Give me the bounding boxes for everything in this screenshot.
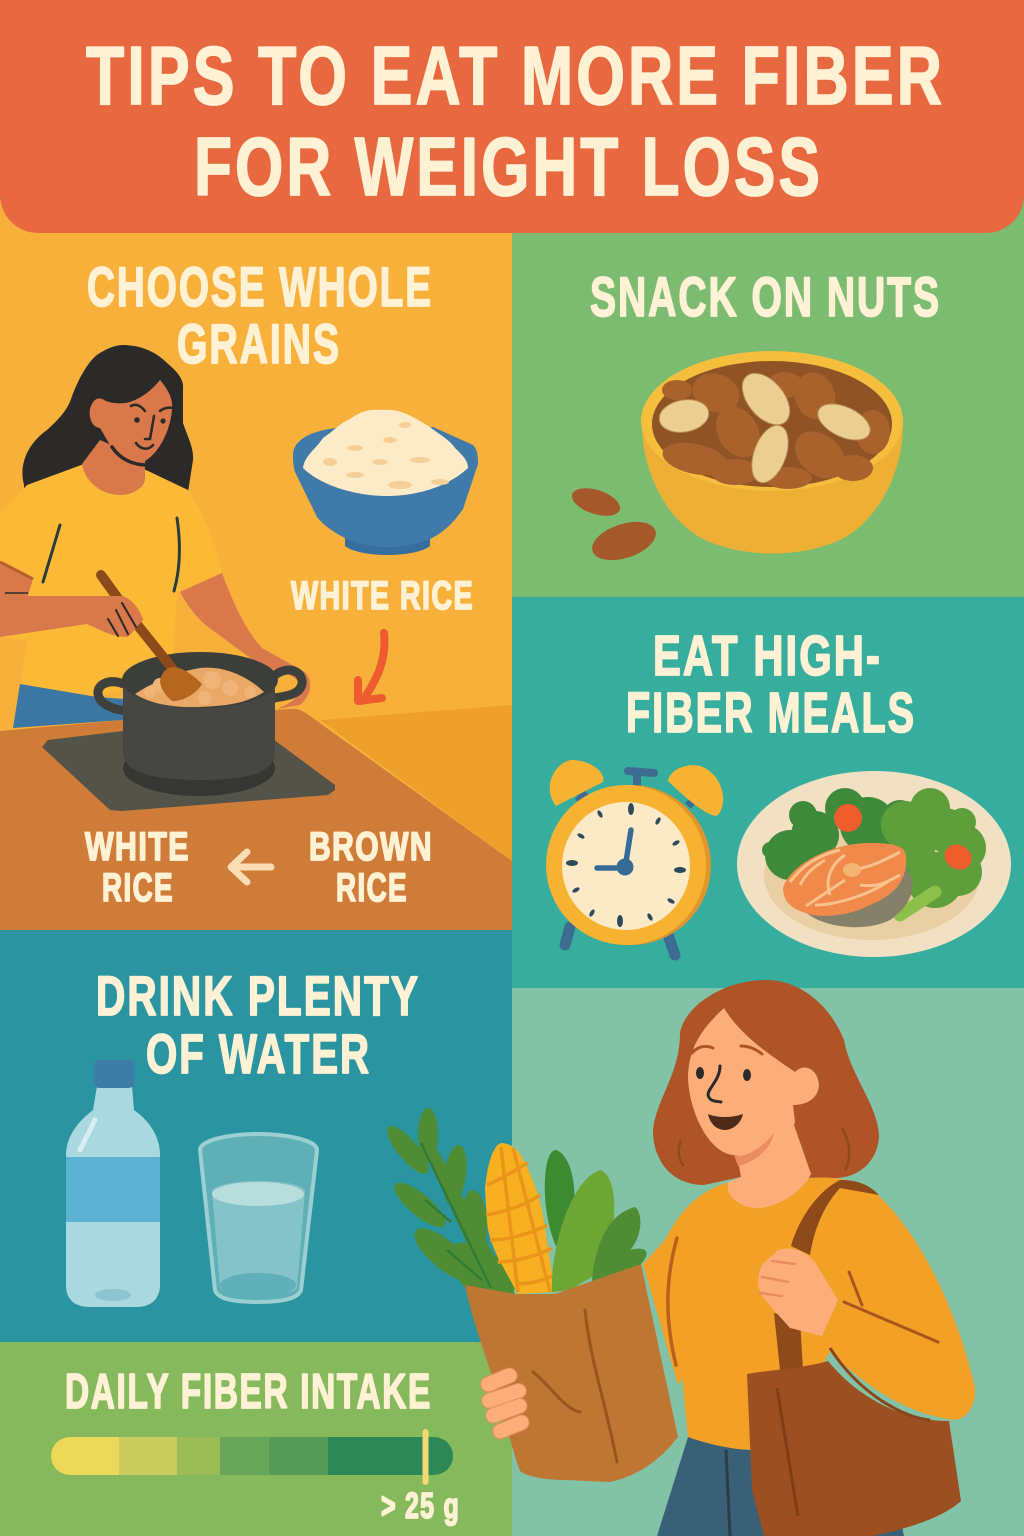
label: greater than 25 g: > 25 g xyxy=(381,1485,460,1526)
heading: drink plenty of water xyxy=(96,964,420,1085)
icon: glass of water xyxy=(200,1134,317,1302)
label: brown rice: BROWN xyxy=(309,825,433,869)
heading: drink plenty of water: OF WATER xyxy=(146,1022,371,1085)
panel: high fiber meals xyxy=(512,597,1024,988)
icon: alarm clock xyxy=(546,760,723,955)
heading: drink plenty of water: DRINK PLENTY xyxy=(96,964,420,1027)
hand holding spoon xyxy=(92,596,143,637)
heading: eat high-fiber meals xyxy=(626,624,916,745)
stove xyxy=(42,731,335,811)
label: brown rice: RICE xyxy=(336,866,408,910)
icon: tote bag xyxy=(747,1348,961,1536)
panel: daily fiber intake xyxy=(0,1342,512,1536)
heading: choose whole grains xyxy=(87,255,433,375)
leafy greens xyxy=(381,1108,519,1300)
title: FOR WEIGHT LOSS xyxy=(194,120,823,213)
heading: eat high-fiber meals: EAT HIGH- xyxy=(653,624,882,688)
label: white rice: WHITE RICE xyxy=(291,574,474,618)
icon: bowl of nuts xyxy=(569,351,903,567)
spoon xyxy=(101,575,202,701)
illustration: woman cooking xyxy=(0,345,310,728)
title xyxy=(86,29,945,213)
label: white rice lower: RICE xyxy=(102,866,174,910)
heading: choose whole grains: CHOOSE WHOLE xyxy=(87,255,433,318)
panel: choose whole grains xyxy=(0,200,512,930)
heading: choose whole grains: GRAINS xyxy=(177,312,341,375)
arrow: left xyxy=(231,852,271,882)
bar chart: fiber gauge xyxy=(51,1429,453,1485)
illustration: woman xyxy=(643,980,975,1536)
panel: drink water xyxy=(0,930,512,1342)
label: white rice lower: WHITE xyxy=(85,825,190,869)
counter xyxy=(0,709,512,930)
icon: plate of salmon and salad xyxy=(737,771,1011,957)
icon: bowl of rice xyxy=(293,410,478,555)
icon: spilled almonds xyxy=(569,483,661,567)
icon: pot xyxy=(98,652,302,796)
label: brown rice xyxy=(309,825,433,910)
icon: water bottle xyxy=(66,1060,160,1307)
icon: hand on bag xyxy=(478,1366,531,1441)
table back xyxy=(320,705,512,861)
panel: woman with groceries xyxy=(381,980,1024,1536)
heading: daily fiber intake: DAILY FIBER INTAKE xyxy=(65,1365,432,1419)
header banner xyxy=(0,0,1024,233)
icon: grocery bag with vegetables xyxy=(381,1108,678,1482)
panel: snack on nuts xyxy=(512,200,1024,597)
arrow: down to white rice xyxy=(358,633,384,701)
label: white rice lower xyxy=(85,825,190,910)
